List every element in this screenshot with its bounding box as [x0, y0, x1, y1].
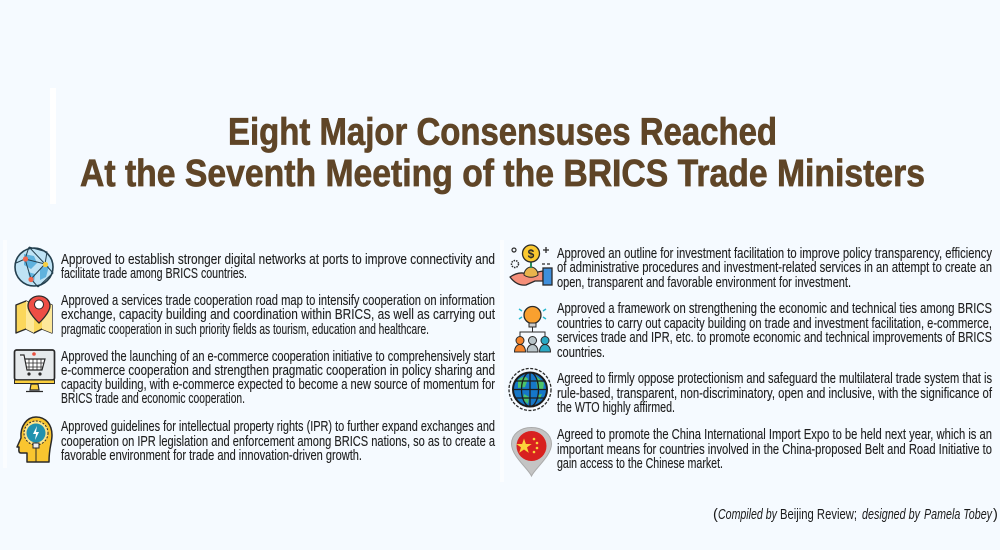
icon: light bulb with three people — [514, 306, 550, 352]
text: economic and technical ties — [557, 301, 992, 361]
text: digital networks — [61, 252, 495, 282]
text: China International Import Expo — [557, 427, 992, 472]
credit caption: ( — [713, 507, 718, 523]
text: e-commerce initiative — [61, 349, 495, 407]
text: intellectual property rights: cooperation on IPR legislation and enforcement among BRICS nations, so as to create a — [61, 434, 496, 450]
text: intellectual property rights: Approved guidelines for intellectual property rights (IPR) to further expand exchanges and — [61, 419, 495, 435]
text: e-commerce initiative: capacity building, with e-commerce expected to become a new source of momentum for — [61, 377, 495, 393]
title: Eight Major Consensuses Reached — [228, 112, 777, 154]
text: intellectual property rights: favorable environment for trade and innovation-driven growth. — [61, 448, 362, 464]
text: oppose protectionism — [557, 371, 993, 416]
credit caption: Compiled by — [718, 507, 778, 523]
text: digital networks: facilitate trade among BRICS countries. — [61, 266, 247, 282]
icon: globe with grid — [509, 368, 551, 410]
text: digital networks: Approved to establish stronger digital networks at ports to improve connectivity and — [61, 252, 495, 268]
text: services trade road map — [61, 293, 495, 338]
icon: digital network globe — [15, 247, 53, 287]
text: investment facilitation: open, transparent and favorable environment for investment. — [557, 275, 851, 291]
text: services trade road map: Approved a services trade cooperation road map to intensify cooperation on information — [61, 293, 495, 309]
text: e-commerce initiative: BRICS trade and economic cooperation. — [61, 391, 245, 407]
credit caption — [713, 507, 998, 523]
icon: shopping cart on monitor — [14, 350, 54, 392]
title — [80, 112, 925, 195]
icon: hand holding coin plant — [510, 245, 552, 285]
icon: head with light bulb — [17, 417, 52, 462]
text: services trade road map: exchange, capacity building and coordination within BRICS, as well as carrying out — [61, 307, 495, 323]
text: investment facilitation — [557, 246, 993, 291]
credit caption: Beijing Review; — [780, 507, 857, 523]
icon: hand holding coin plant: $ — [528, 247, 535, 261]
credit caption: designed by — [862, 507, 921, 523]
credit caption: ) — [993, 507, 998, 523]
text: China International Import Expo: gain access to the Chinese market. — [557, 456, 723, 472]
icon: China flag map pin — [512, 428, 552, 476]
text: services trade road map: pragmatic cooperation in such priority fields as tourism, education and healthcare. — [61, 322, 429, 338]
text: e-commerce initiative: e-commerce cooperation and strengthen pragmatic cooperation in policy sharing and — [61, 363, 495, 379]
text: e-commerce initiative: Approved the launching of an e-commerce cooperation initiative to comprehensively start — [61, 349, 495, 365]
icon: map with pin — [16, 296, 52, 333]
text: intellectual property rights — [61, 419, 496, 464]
text: oppose protectionism: the WTO highly affirmed. — [557, 400, 675, 416]
text: economic and technical ties: countries. — [557, 345, 605, 361]
